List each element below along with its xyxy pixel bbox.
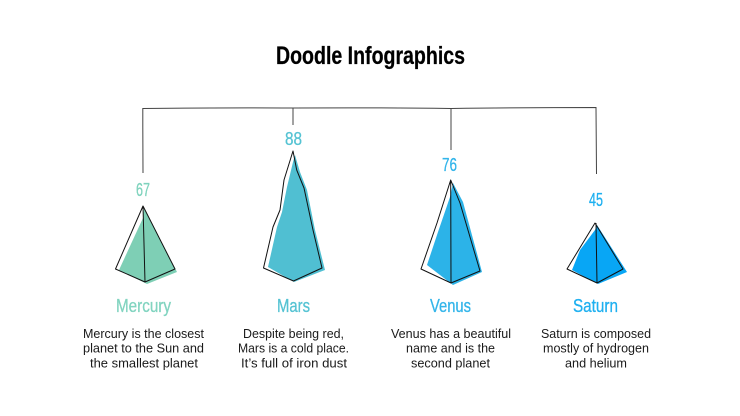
value: 67: 67 [136, 180, 150, 200]
panel: Mercury [83, 180, 204, 370]
description: Venus: Venus has a beautiful [391, 326, 511, 341]
description: Mercury: planet to the Sun and [83, 341, 204, 356]
name: Venus: Venus [430, 296, 471, 316]
description: Venus [391, 326, 511, 370]
description: Mercury: the smallest planet [90, 355, 198, 370]
name: Mars: Mars [277, 296, 310, 316]
description: Mercury: Mercury is the closest [83, 326, 204, 341]
name: Saturn: Saturn [573, 296, 618, 316]
description: Venus: name and is the [406, 341, 495, 356]
value: 76: 76 [442, 155, 457, 175]
icon: Saturn pyramid [567, 223, 627, 284]
value: 88: 88 [285, 129, 302, 149]
description: Saturn: and helium [565, 355, 627, 370]
description: Saturn [541, 326, 651, 370]
connector lines [143, 108, 597, 174]
description: Mercury [83, 326, 204, 370]
description: Saturn: mostly of hydrogen [543, 341, 649, 356]
description: Venus: second planet [411, 355, 490, 370]
icon: Mars pyramid [264, 151, 325, 282]
description: Mars: Mars is a cold place. [238, 341, 349, 356]
description: Saturn: Saturn is composed [541, 326, 651, 341]
panel: Venus [391, 155, 511, 370]
value: 45: 45 [589, 190, 603, 210]
description: Mars [238, 326, 349, 370]
panel: Mars [238, 129, 349, 370]
icon: Venus pyramid [421, 180, 482, 285]
icon: Mercury pyramid [116, 206, 177, 284]
description: Mars: Despite being red, [243, 326, 344, 341]
description: Mars: It’s full of iron dust [241, 355, 347, 370]
title: Doodle Infographics [276, 42, 465, 70]
panel: Saturn [541, 190, 651, 370]
name: Mercury: Mercury [116, 296, 171, 316]
